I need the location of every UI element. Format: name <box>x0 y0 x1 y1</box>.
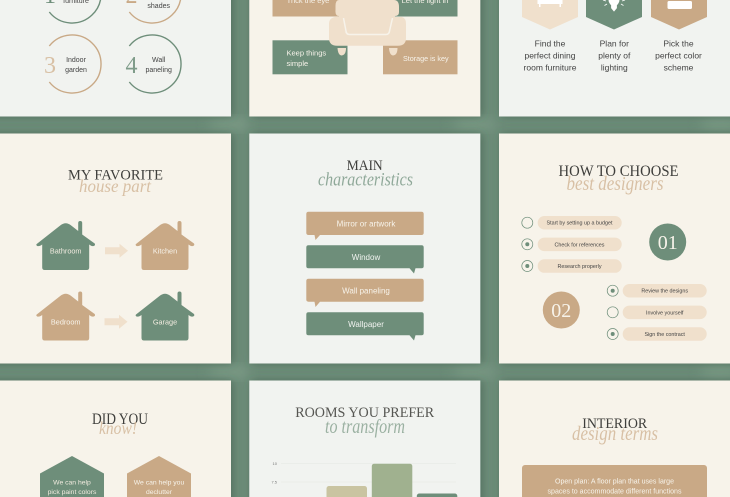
checklist item: references: Check for references <box>554 242 605 248</box>
circle 2 shades: shades <box>147 3 170 10</box>
title: design terms <box>572 423 658 445</box>
title: ROOMS YOU PREFER <box>295 405 434 421</box>
panel: my favorite house part <box>0 134 231 364</box>
number badge 01 <box>649 224 686 260</box>
panel: did you know <box>0 380 231 497</box>
bubble: window: Window <box>352 253 380 262</box>
title <box>572 416 658 445</box>
panel: interior design terms <box>499 380 730 497</box>
title: DID YOU <box>92 411 148 428</box>
tip: color scheme: perfect color <box>655 50 702 60</box>
icon: table <box>538 0 562 7</box>
card: declutter: We can help you <box>134 480 184 486</box>
arrow 1 <box>105 244 128 258</box>
card: paint colors <box>40 456 104 497</box>
title: characteristics <box>318 170 413 190</box>
bubble: window <box>306 245 424 274</box>
tip: dining furniture: room furniture <box>524 62 577 72</box>
circle 3 indoor garden: garden <box>65 67 87 74</box>
tip: color scheme: scheme <box>664 62 694 72</box>
tip: lighting: plenty of <box>598 50 631 60</box>
checklist item: research: Research properly <box>557 264 602 270</box>
checklist item: review <box>607 284 707 298</box>
circle 3 indoor garden: 3 <box>44 53 56 79</box>
checklist item: budget <box>522 216 622 230</box>
title <box>318 158 413 190</box>
panel: main characteristics <box>249 134 480 364</box>
circle 1 furniture <box>44 0 101 23</box>
house: bathroom: Bathroom <box>50 246 82 255</box>
title: best designers <box>566 173 664 195</box>
checklist item: review: Review the designs <box>641 289 688 295</box>
title <box>68 168 163 196</box>
house: bedroom: Bedroom <box>51 318 81 326</box>
bubble: wallpaper: Wallpaper <box>348 320 384 329</box>
tip: dining furniture: perfect dining <box>524 50 576 60</box>
panel: how to choose best designers <box>499 134 730 364</box>
tip: keep things simple <box>272 40 348 74</box>
bubble: mirror or artwork <box>306 212 424 240</box>
definition card <box>522 465 707 497</box>
title: house part <box>79 176 152 196</box>
tip: storage is key <box>383 40 458 74</box>
panel: sofa tips <box>249 0 480 116</box>
tip: lighting <box>586 0 642 72</box>
title <box>295 405 434 438</box>
bubble: wall paneling: Wall paneling <box>342 286 390 296</box>
panel: home ideas circles <box>0 0 231 116</box>
icon: light bulb <box>603 0 625 11</box>
bar chart: 7.5 <box>271 480 278 484</box>
tip: let the light in <box>383 0 458 16</box>
bar chart <box>271 461 457 497</box>
bubble: mirror or artwork: Mirror or artwork <box>337 220 396 228</box>
tip: dining furniture: Find the <box>535 38 566 48</box>
circle 3 indoor garden <box>44 35 101 93</box>
panel: dining room tips <box>499 0 730 116</box>
circle 4 wall paneling: 4 <box>126 53 138 79</box>
checklist item: references <box>522 238 622 251</box>
title <box>92 411 148 438</box>
bar chart: 10 <box>273 461 278 466</box>
title: HOW TO CHOOSE <box>558 163 678 180</box>
checklist item: contract: Sign the contract <box>644 332 685 338</box>
card: paint colors: pick paint colors <box>48 489 97 496</box>
tip: trick the eye <box>272 0 348 16</box>
tip: color scheme: Pick the <box>663 38 694 48</box>
checklist item: involve <box>607 306 707 319</box>
house: bedroom <box>36 292 95 340</box>
tip: color scheme <box>651 0 707 72</box>
circle 4 wall paneling <box>126 35 181 93</box>
panel: rooms you prefer <box>249 380 480 497</box>
tip: dining furniture <box>522 0 578 72</box>
title <box>558 163 678 195</box>
house: kitchen: Kitchen <box>153 246 177 255</box>
icon: sofa <box>329 0 406 56</box>
title: INTERIOR <box>582 416 648 432</box>
tip: storage is key: Storage is key <box>403 54 449 63</box>
title: know! <box>99 418 137 438</box>
circle 3 indoor garden: Indoor <box>66 57 87 64</box>
house: kitchen <box>136 221 194 270</box>
card: declutter: declutter <box>146 489 173 496</box>
definition card: spaces to accommodate different functions <box>548 488 682 496</box>
house: garage: Garage <box>153 318 177 326</box>
checklist item: research <box>522 259 622 273</box>
arrow 2 <box>104 315 128 329</box>
house: garage <box>136 292 194 340</box>
icon: paint roller <box>668 1 692 9</box>
circle 4 wall paneling: paneling <box>145 67 172 74</box>
checklist item: budget: Start by setting up a budget <box>547 221 613 227</box>
checklist item: contract <box>607 327 707 341</box>
tip: keep things simple: simple <box>286 59 308 68</box>
checklist item: involve: Involve yourself <box>646 310 684 316</box>
tip: lighting: lighting <box>601 62 628 72</box>
bubble: wallpaper <box>306 312 424 340</box>
card: declutter <box>127 456 191 497</box>
tip: keep things simple: Keep things <box>286 48 326 58</box>
house: bathroom <box>36 221 95 270</box>
circle 2 shades <box>126 0 181 23</box>
bubble: wall paneling <box>306 279 424 307</box>
title: MAIN <box>347 158 383 174</box>
tip: lighting: Plan for <box>600 38 629 48</box>
number badge 02 <box>543 292 580 328</box>
title: MY FAVORITE <box>68 168 163 184</box>
definition card: Open plan: A floor plan that uses large <box>555 478 674 486</box>
number badge 01: 01 <box>658 232 678 254</box>
title: to transform <box>325 416 405 438</box>
number badge 02: 02 <box>551 300 571 322</box>
card: paint colors: We can help <box>53 480 91 486</box>
circle 4 wall paneling: Wall <box>152 57 166 64</box>
